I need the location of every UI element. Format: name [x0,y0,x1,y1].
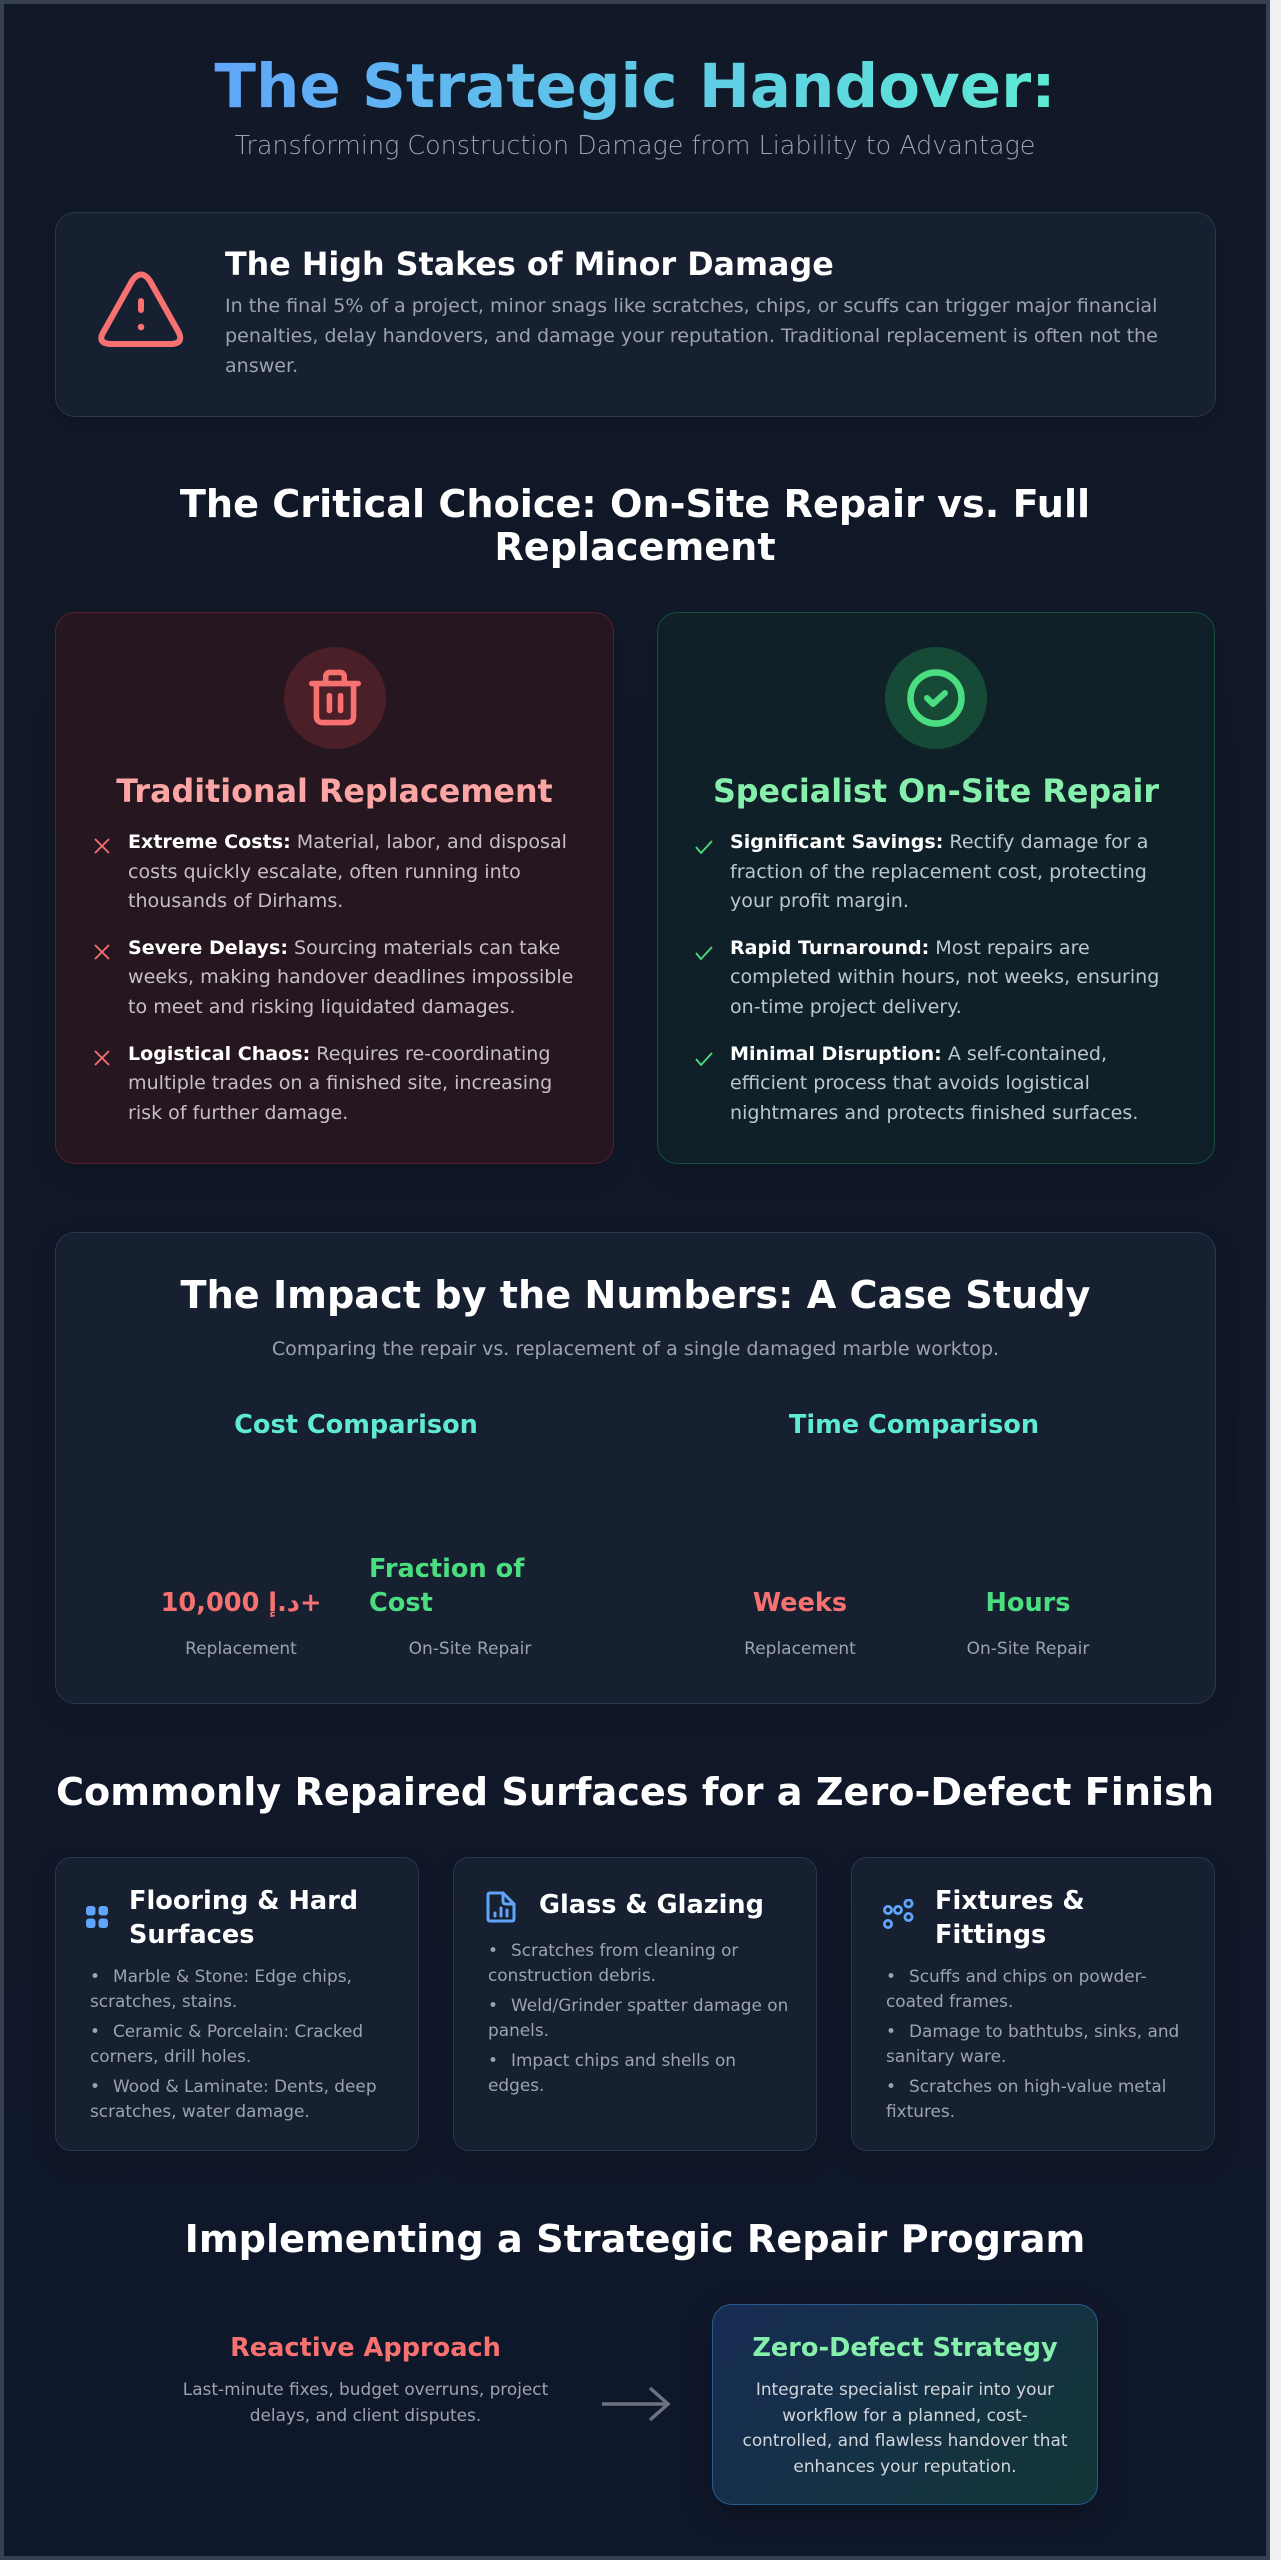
text: case study subtitle: Comparing the repair vs. replacement of a single damaged marble worktop. [272,1338,999,1360]
list: glass: • [488,1940,498,1960]
list: flooring: • [90,2076,100,2096]
item: severe delays: Severe Delays: Sourcing materials can take [128,937,560,959]
text: reactive approach: delays, and client disputes. [250,2405,481,2425]
heading: specialist repair: Specialist On-Site Repair [713,774,1159,810]
heading: implementing: Implementing a Strategic Repair Program [185,2218,1085,2262]
item: rapid turnaround [695,937,1159,1018]
text: high stakes [225,295,1158,377]
list: glass [488,1940,788,2095]
text: high stakes: answer. [225,355,298,377]
item: significant savings: fraction of the replacement cost, protecting [730,861,1147,883]
label: repair time: On-Site Repair [967,1638,1089,1658]
stat: repair time: Hours [985,1588,1071,1618]
stat: replacement time: Weeks [753,1588,847,1618]
heading: fixtures: Fittings [935,1920,1046,1950]
label: replacement cost: Replacement [185,1638,297,1658]
item: extreme costs: Extreme Costs: Material, labor, and disposal [128,831,567,853]
list: flooring: Ceramic & Porcelain: Cracked [113,2021,363,2041]
heading: traditional replacement: Traditional Replacement [116,774,553,810]
list: flooring: scratches, stains. [90,1991,237,2011]
list: flooring: • [90,2021,100,2041]
stat: repair cost [369,1554,525,1618]
icon: grid [86,1906,108,1928]
heading: high stakes: The High Stakes of Minor Damage [225,247,834,283]
heading: glass: Glass & Glazing [539,1890,764,1920]
item: logistical chaos: risk of further damage. [128,1102,348,1124]
item: significant savings: your profit margin. [730,890,909,912]
label: repair cost: On-Site Repair [409,1638,531,1658]
item: rapid turnaround: completed within hours, not weeks, ensuring [730,966,1159,988]
stat: repair cost: Cost [369,1588,433,1618]
panel: traditional replacement [55,612,614,1164]
text: high stakes: In the final 5% of a project, minor snags like scratches, chips, or scuffs can trigger major financial [225,295,1157,317]
icon: warning triangle [98,272,184,347]
text: high stakes: penalties, delay handovers, and damage your reputation. Traditional replacement is often not the [225,325,1158,347]
list: glass: panels. [488,2020,549,2040]
list: fixtures: • [886,1966,896,1986]
text: zero-defect strategy: enhances your reputation. [793,2456,1017,2476]
list: fixtures: • [886,2021,896,2041]
heading: fixtures: Fixtures & [935,1886,1085,1916]
item: rapid turnaround: on-time project delivery. [730,996,962,1018]
heading: critical choice: Replacement [494,526,776,570]
icon: check circle [885,647,987,749]
heading: zero-defect strategy: Zero-Defect Strategy [752,2332,1058,2362]
text: zero-defect strategy: Integrate specialist repair into your [756,2379,1054,2399]
item: logistical chaos [94,1043,552,1124]
panel: zero-defect strategy [712,2304,1098,2505]
list: flooring: • [90,1966,100,1986]
icon: trash [284,647,386,749]
stat: repair cost: Fraction of [369,1554,524,1584]
subtitle: Transforming Construction Damage from Liability to Advantage [235,130,1035,160]
heading: critical choice: The Critical Choice: On-Site Repair vs. Full [180,483,1090,527]
list: fixtures: • [886,2076,896,2096]
text: zero-defect strategy: workflow for a planned, cost- [782,2405,1028,2425]
item: rapid turnaround: Rapid Turnaround: Most repairs are [730,937,1090,959]
icon: document chart [486,1892,516,1922]
list: fixtures: Scuffs and chips on powder- [909,1966,1147,1986]
heading: time comparison: Time Comparison [789,1410,1039,1440]
heading: flooring [129,1886,358,1950]
panel: fixtures [851,1857,1215,2151]
list: fixtures [886,1966,1179,2121]
item: extreme costs: costs quickly escalate, often running into [128,861,521,883]
heading: flooring: Flooring & Hard [129,1886,358,1916]
item: minimal disruption: nightmares and protects finished surfaces. [730,1102,1138,1124]
list: flooring: Wood & Laminate: Dents, deep [113,2076,377,2096]
item: significant savings [695,831,1148,912]
heading: fixtures [935,1886,1085,1950]
heading: flooring: Surfaces [129,1920,254,1950]
list: fixtures: Damage to bathtubs, sinks, and [909,2021,1179,2041]
item: significant savings: Significant Savings: Rectify damage for a [730,831,1148,853]
list: flooring: corners, drill holes. [90,2046,251,2066]
item: severe delays: weeks, making handover deadlines impossible [128,966,573,988]
text: reactive approach [183,2379,548,2425]
text: reactive approach: Last-minute fixes, budget overruns, project [183,2379,548,2399]
item: extreme costs [94,831,567,912]
list: glass: construction debris. [488,1965,656,1985]
panel: specialist repair [657,612,1215,1164]
panel: glass [453,1857,817,2151]
item: minimal disruption: efficient process that avoids logistical [730,1072,1090,1094]
panel: flooring [55,1857,419,2151]
list: fixtures: Scratches on high-value metal [909,2076,1166,2096]
text: zero-defect strategy [743,2379,1068,2476]
item: minimal disruption: Minimal Disruption: A self-contained, [730,1043,1107,1065]
list: glass: • [488,1995,498,2015]
heading: reactive approach: Reactive Approach [230,2332,501,2362]
item: logistical chaos: Logistical Chaos: Requires re-coordinating [128,1043,550,1065]
label: replacement time: Replacement [744,1638,856,1658]
item: minimal disruption [695,1043,1138,1124]
heading: case study: The Impact by the Numbers: A Case Study [181,1274,1090,1318]
list: fixtures: sanitary ware. [886,2046,1006,2066]
block: reactive approach [183,2332,548,2425]
title: The Strategic Handover: [214,51,1056,122]
arrow [602,2386,670,2422]
list: glass: Weld/Grinder spatter damage on [511,1995,788,2015]
panel: high stakes [55,212,1216,417]
list: flooring: Marble & Stone: Edge chips, [113,1966,352,1986]
list: glass: Impact chips and shells on [511,2050,736,2070]
item: severe delays: to meet and risking liquidated damages. [128,996,515,1018]
text: zero-defect strategy: controlled, and flawless handover that [743,2430,1067,2450]
list: glass: • [488,2050,498,2070]
icon: nodes [883,1899,914,1929]
list: flooring [90,1966,377,2121]
stat: replacement cost: 10,000 د.إ+ [161,1588,321,1618]
list: glass: Scratches from cleaning or [511,1940,738,1960]
panel: case study [55,1232,1216,1704]
list: flooring: scratches, water damage. [90,2101,310,2121]
heading: cost comparison: Cost Comparison [234,1410,478,1440]
heading: commonly repaired surfaces: Commonly Repaired Surfaces for a Zero-Defect Finish [56,1771,1214,1815]
item: extreme costs: thousands of Dirhams. [128,890,343,912]
item: logistical chaos: multiple trades on a finished site, increasing [128,1072,552,1094]
list: glass: edges. [488,2075,544,2095]
list: fixtures: coated frames. [886,1991,1013,2011]
item: severe delays [94,937,573,1018]
heading: critical choice [180,483,1090,570]
list: fixtures: fixtures. [886,2101,955,2121]
